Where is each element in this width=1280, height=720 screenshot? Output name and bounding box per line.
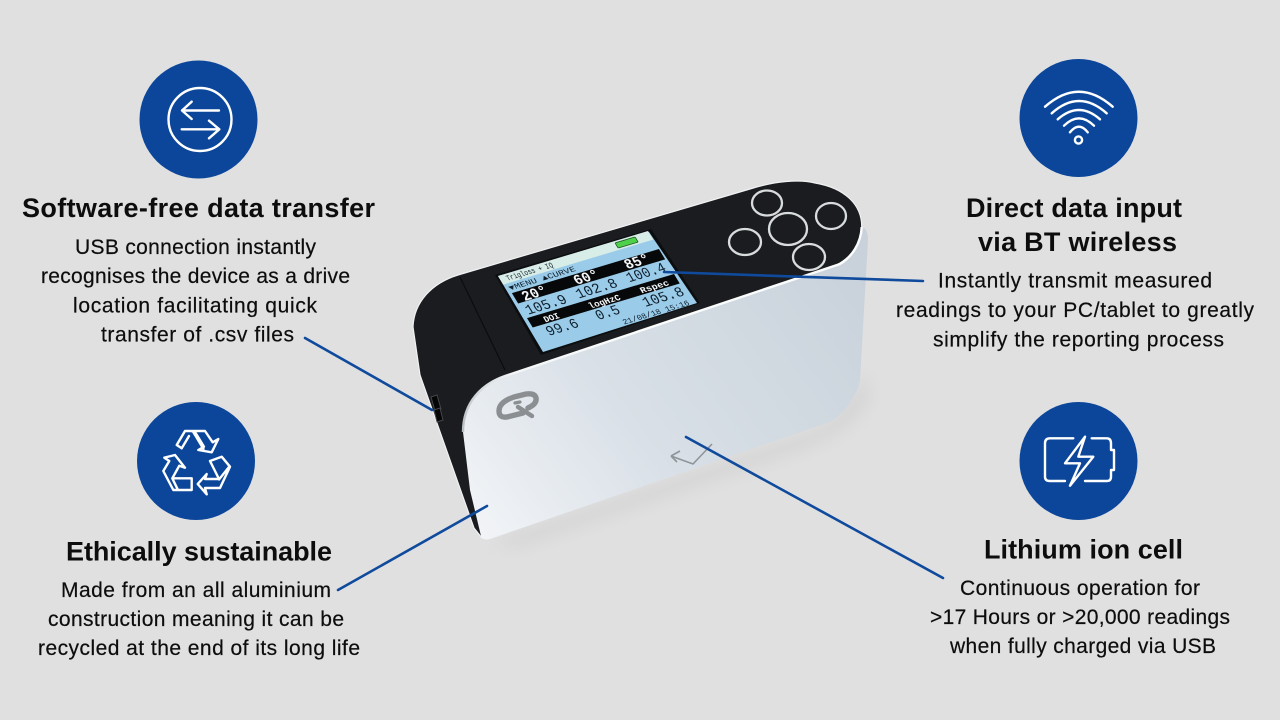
device screen: Rspec — [638, 278, 671, 296]
feature: direct data input — [896, 59, 1254, 352]
icon: recycling — [137, 402, 255, 520]
device shadow — [490, 370, 870, 546]
heading: Direct data input — [966, 193, 1182, 223]
text block: Instantly transmit measured — [938, 270, 1212, 292]
text block — [38, 579, 360, 660]
text block: recognises the device as a drive — [41, 265, 350, 288]
device screen: 102.8 — [572, 276, 621, 303]
heading: Ethically sustainable — [66, 536, 332, 566]
device screen: 100.4 — [623, 260, 670, 286]
screen readings row: 105.9 — [522, 292, 571, 319]
device screen: Trigloss + IQ — [504, 261, 555, 283]
feature: ethically sustainable — [38, 402, 360, 660]
feature: lithium ion cell — [930, 402, 1230, 658]
device front panel — [463, 227, 868, 540]
text block: when fully charged via USB — [949, 635, 1216, 658]
device screen: 105.8 — [639, 284, 688, 311]
text block — [930, 577, 1230, 658]
device buttons — [729, 190, 846, 270]
screen bar one — [512, 249, 665, 303]
text block — [896, 270, 1254, 352]
USB port — [431, 395, 443, 422]
text block: transfer of .csv files — [101, 324, 294, 346]
device: gloss meter — [413, 181, 870, 546]
heading — [966, 193, 1182, 257]
device black body — [413, 181, 862, 538]
icon: wireless — [1020, 59, 1138, 177]
text block: simplify the reporting process — [933, 328, 1224, 352]
device screen: 60° — [570, 267, 603, 289]
device panel rim — [463, 227, 862, 432]
device screen — [495, 229, 700, 355]
heading: Lithium ion cell — [984, 534, 1183, 564]
callout lines — [305, 272, 943, 590]
feature: software-free data transfer — [22, 60, 375, 346]
device screen: 20° — [518, 283, 551, 305]
text block: Made from an all aluminium — [61, 579, 331, 602]
device screen: 85° — [621, 251, 654, 273]
screen readings row two: 99.6 — [542, 316, 583, 340]
device seam line — [460, 277, 505, 370]
menu row: ▼MENU ▲CURVE — [507, 266, 578, 293]
text block: USB connection instantly — [75, 236, 316, 259]
screen bar two — [527, 274, 680, 328]
icon: transfer arrows — [140, 60, 258, 178]
screen timestamp: 21/08/18 15:16 — [621, 299, 692, 327]
text block: construction meaning it can be — [48, 608, 344, 631]
heading: via BT wireless — [978, 227, 1177, 257]
text block: Continuous operation for — [960, 577, 1200, 600]
text block: readings to your PC/tablet to greatly — [896, 299, 1254, 322]
text block: >17 Hours or >20,000 readings — [930, 606, 1230, 629]
screen title band — [498, 231, 653, 285]
device logo — [499, 394, 536, 417]
device screen: logHzC — [586, 293, 623, 311]
battery indicator — [615, 237, 638, 248]
device screen: 0.5 — [592, 302, 624, 324]
text block — [41, 236, 350, 346]
icon: battery charging — [1020, 402, 1138, 520]
text block: recycled at the end of its long life — [38, 637, 360, 660]
device screen: DOI — [541, 311, 562, 325]
device arrows marking — [671, 444, 712, 464]
text block: location facilitating quick — [73, 294, 318, 318]
heading: Software-free data transfer — [22, 193, 375, 223]
